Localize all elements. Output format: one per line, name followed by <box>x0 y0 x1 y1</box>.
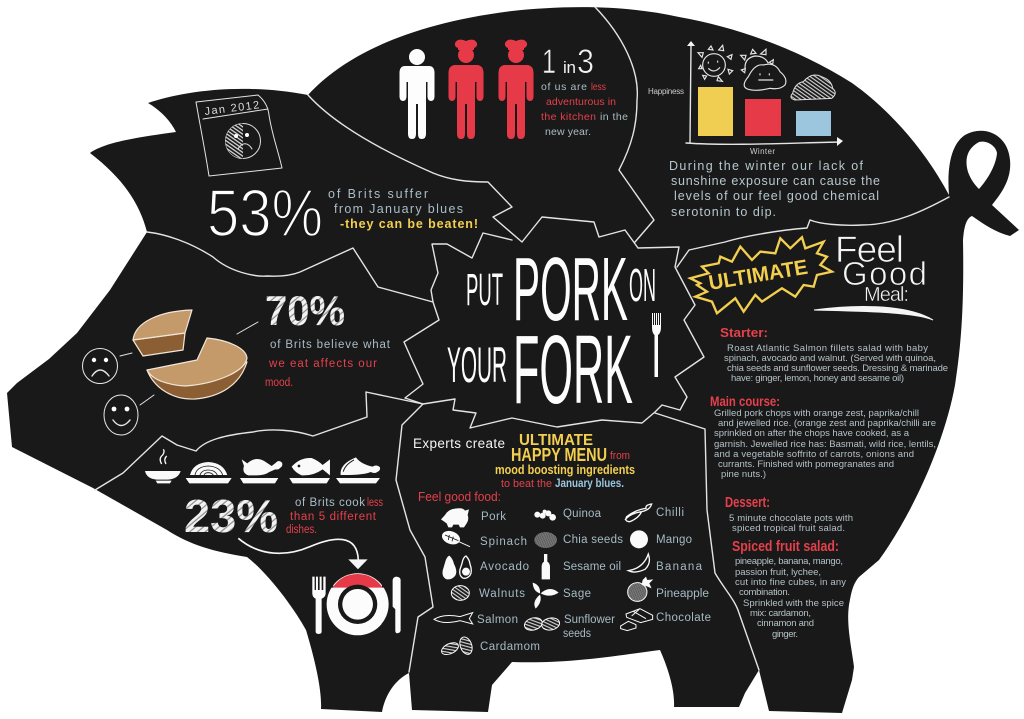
text: less adventurous <box>541 81 628 138</box>
heading: happy menu: Feel good food: <box>418 489 501 504</box>
icon: roast chicken <box>240 459 282 483</box>
food labels: Salmon <box>477 614 518 626</box>
text: cook less: than 5 different <box>290 511 377 523</box>
title: PUT <box>466 264 503 315</box>
menu: dessert: spiced tropical fruit salad. <box>732 523 845 534</box>
text: less adventurous: of us are <box>541 81 587 93</box>
text: winter serotonin: serotonin to dip. <box>671 205 776 219</box>
icon: cardamom <box>440 635 474 657</box>
icon: soup bowl <box>145 449 181 483</box>
panel: winter happiness <box>648 41 880 219</box>
icon: dark cloud <box>791 75 835 100</box>
heading: happy menu: January blues. <box>555 478 624 490</box>
icon: sage <box>533 583 559 609</box>
menu: main course: Main course: <box>710 393 780 409</box>
text: January blues: -they can be beaten! <box>340 217 478 231</box>
icon: white person <box>400 49 434 139</box>
menu: dessert: Dessert: <box>725 494 770 511</box>
menu: spiced fruit salad: Sprinkled with the spice <box>743 598 844 609</box>
icon: calendar with sad face: Jan 2012 <box>204 99 260 118</box>
chart: pie with missing slice <box>133 310 247 399</box>
text: less adventurous: adventurous in <box>546 96 616 108</box>
text: winter serotonin <box>669 159 880 219</box>
text: cook less: less <box>367 497 383 509</box>
food labels: Mango <box>656 534 692 546</box>
icon: mango <box>630 530 648 548</box>
menu: main course <box>710 393 936 480</box>
menu: dessert <box>725 494 853 534</box>
panel: mood and food <box>82 287 391 435</box>
statistic: 1 in 3 <box>542 43 594 81</box>
menu: spiced fruit salad: combination. <box>739 587 790 598</box>
food labels: Chia seeds <box>563 534 623 546</box>
menu: starter <box>720 325 948 384</box>
heading: feel good meal: Meal: <box>864 284 909 306</box>
icon: pig <box>441 508 469 527</box>
text: ON <box>629 259 656 311</box>
menu: main course: and jewelled rice. (orange zest and paprika/chilli are <box>718 418 936 429</box>
panel: less adventurous <box>400 40 628 139</box>
icon: happy face <box>104 395 154 435</box>
menu: starter: chia seeds and sunflower seeds. Dressing & marinade <box>727 363 948 374</box>
text: what we eat <box>265 339 391 389</box>
icon: avocado <box>442 556 471 579</box>
menu: main course: sprinkled on after the chops have cooked, as a <box>714 428 910 439</box>
food labels: seeds <box>563 628 591 640</box>
menu: spiced fruit salad: cinnamon and <box>757 618 814 629</box>
statistic: 53%: 53% <box>207 176 323 251</box>
menu: spiced fruit salad: Spiced fruit salad: <box>732 538 839 555</box>
icon: ultimate starburst <box>690 237 832 313</box>
icon: red chef two <box>498 40 534 139</box>
menu: starter: Starter: <box>720 325 768 340</box>
heading: happy menu: Experts create <box>413 436 505 451</box>
food labels: Pineapple <box>656 588 709 600</box>
heading: happy menu: mood boosting ingredients <box>495 462 635 477</box>
menu: spiced fruit salad: mix: cardamon, <box>750 608 811 619</box>
text: less adventurous: in the <box>600 111 628 123</box>
panel: title burst <box>447 240 661 424</box>
text: what we eat: of Brits believe what <box>270 339 391 351</box>
heading: happy menu: from <box>610 450 630 462</box>
food labels: Sunflower <box>564 614 615 626</box>
text: January blues <box>328 187 478 231</box>
menu: main course: Grilled pork chops with orange zest, paprika/chill <box>714 408 919 419</box>
yellow bar <box>698 87 733 136</box>
icon: quinoa <box>534 510 556 521</box>
icons: row of dishes <box>145 449 380 483</box>
menu: spiced fruit salad: cut into fine cubes, in any <box>735 577 846 588</box>
menu: spiced fruit salad <box>732 538 846 640</box>
icon: sunflower seeds <box>523 616 561 632</box>
statistic: 1 in 3: 3 <box>577 43 594 81</box>
statistic: 1 in 3: 1 <box>542 43 556 81</box>
menu: main course: and a vegetable soffrito of carrots, onions and <box>714 449 914 460</box>
panel: ultimate feel good meal <box>690 229 948 640</box>
menu: main course: pine nuts.) <box>721 469 766 480</box>
statistic: 1 in 3: in <box>563 58 576 77</box>
title <box>447 240 656 424</box>
menu: starter: have: ginger, lemon, honey and sesame oil) <box>731 373 904 384</box>
menu: spiced fruit salad: passion fruit, lychee, <box>735 567 821 578</box>
menu: spiced fruit salad: ginger. <box>772 629 798 640</box>
text: what we eat: we eat affects our <box>268 358 377 370</box>
icon: sun and cloud <box>741 49 786 90</box>
food labels: Spinach <box>480 536 527 548</box>
food labels: Pork <box>481 511 506 523</box>
food labels: Chocolate <box>656 612 711 624</box>
title: YOUR <box>447 337 507 393</box>
menu: dessert: 5 minute chocolate pots with <box>729 513 853 524</box>
icon: banana <box>628 554 649 572</box>
label: ultimate: ULTIMATE <box>707 256 809 295</box>
menu: main course: currants. Finished with pomegranates and <box>718 459 894 470</box>
icon: sesame oil bottle <box>542 554 550 579</box>
heading: happy menu: HAPPY MENU <box>511 445 607 465</box>
text: winter serotonin: levels of our feel good chemical <box>674 189 879 203</box>
heading: happy menu: ULTIMATE <box>519 432 593 449</box>
menu: main course: garnish. Jewelled rice has: Basmati, wild rice, lentils, <box>714 439 936 450</box>
icon: spaghetti <box>186 462 232 483</box>
red bar <box>745 99 781 136</box>
icon: chocolate <box>621 609 653 631</box>
heading: feel good meal <box>814 229 933 320</box>
section divider lines <box>95 7 949 672</box>
text: less adventurous: the kitchen <box>541 111 596 123</box>
food labels: Quinoa <box>563 508 602 520</box>
menu: starter: spinach, avocado and walnut. (Served with quinoa, <box>724 353 936 364</box>
icon: fork <box>652 313 661 377</box>
food labels: Banana <box>656 561 703 573</box>
bar chart: Happiness <box>648 87 684 96</box>
text: winter serotonin: During the winter our lack of <box>669 159 864 173</box>
icon: sad face <box>82 348 132 384</box>
icon: fish <box>289 458 330 483</box>
text: cook less <box>286 497 383 536</box>
food labels: Sage <box>563 588 591 600</box>
food labels: Walnuts <box>479 588 525 600</box>
food labels <box>477 507 711 653</box>
text: winter serotonin: sunshine exposure can cause the <box>671 174 880 188</box>
food labels: Chilli <box>656 507 684 519</box>
text: cook less: of Brits cook <box>295 497 365 509</box>
statistic: 23%: 23% <box>184 490 278 542</box>
icon: chia seeds <box>534 532 557 548</box>
icon: plate with cutlery <box>312 573 401 635</box>
icon: red chef <box>448 40 484 139</box>
menu: spiced fruit salad: pineapple, banana, mango, <box>735 556 843 567</box>
food labels: Sesame oil <box>563 561 621 573</box>
panel: happy menu foods <box>413 432 711 657</box>
text: what we eat: mood. <box>265 377 293 389</box>
text: less adventurous: less <box>591 81 606 93</box>
icon: ham <box>336 457 380 483</box>
food icons <box>434 504 653 657</box>
title: FORK <box>513 315 633 424</box>
text: less adventurous: new year. <box>545 126 591 138</box>
icon: pineapple <box>628 577 653 601</box>
blue bar <box>796 111 831 136</box>
heading: happy menu <box>413 432 635 504</box>
heading: feel good meal: Good <box>842 255 927 292</box>
icon: salmon <box>434 613 473 624</box>
heading: feel good meal: Feel <box>835 229 904 270</box>
food labels: Cardamom <box>480 641 540 653</box>
text: cook less: dishes. <box>286 524 317 536</box>
icon: chilli <box>625 504 652 522</box>
icon: walnut <box>451 586 469 600</box>
bar chart <box>648 41 843 156</box>
heading: happy menu: to beat the <box>501 478 552 490</box>
menu: starter: Roast Atlantic Salmon fillets salad with baby <box>727 343 928 354</box>
panel: January blues <box>196 95 478 251</box>
text: January blues: from January blues <box>334 202 463 216</box>
icon: calendar with sad face <box>196 95 282 176</box>
arrow <box>238 538 368 569</box>
title: PORK <box>513 240 628 340</box>
food labels: Avocado <box>480 561 529 573</box>
bar chart: Winter <box>750 147 775 156</box>
icon: sun <box>698 45 733 81</box>
statistic: 70%: 70% <box>265 287 345 334</box>
panel: cooking <box>145 449 401 635</box>
icon: spinach <box>440 529 470 547</box>
text: January blues: of Brits suffer <box>328 187 428 201</box>
